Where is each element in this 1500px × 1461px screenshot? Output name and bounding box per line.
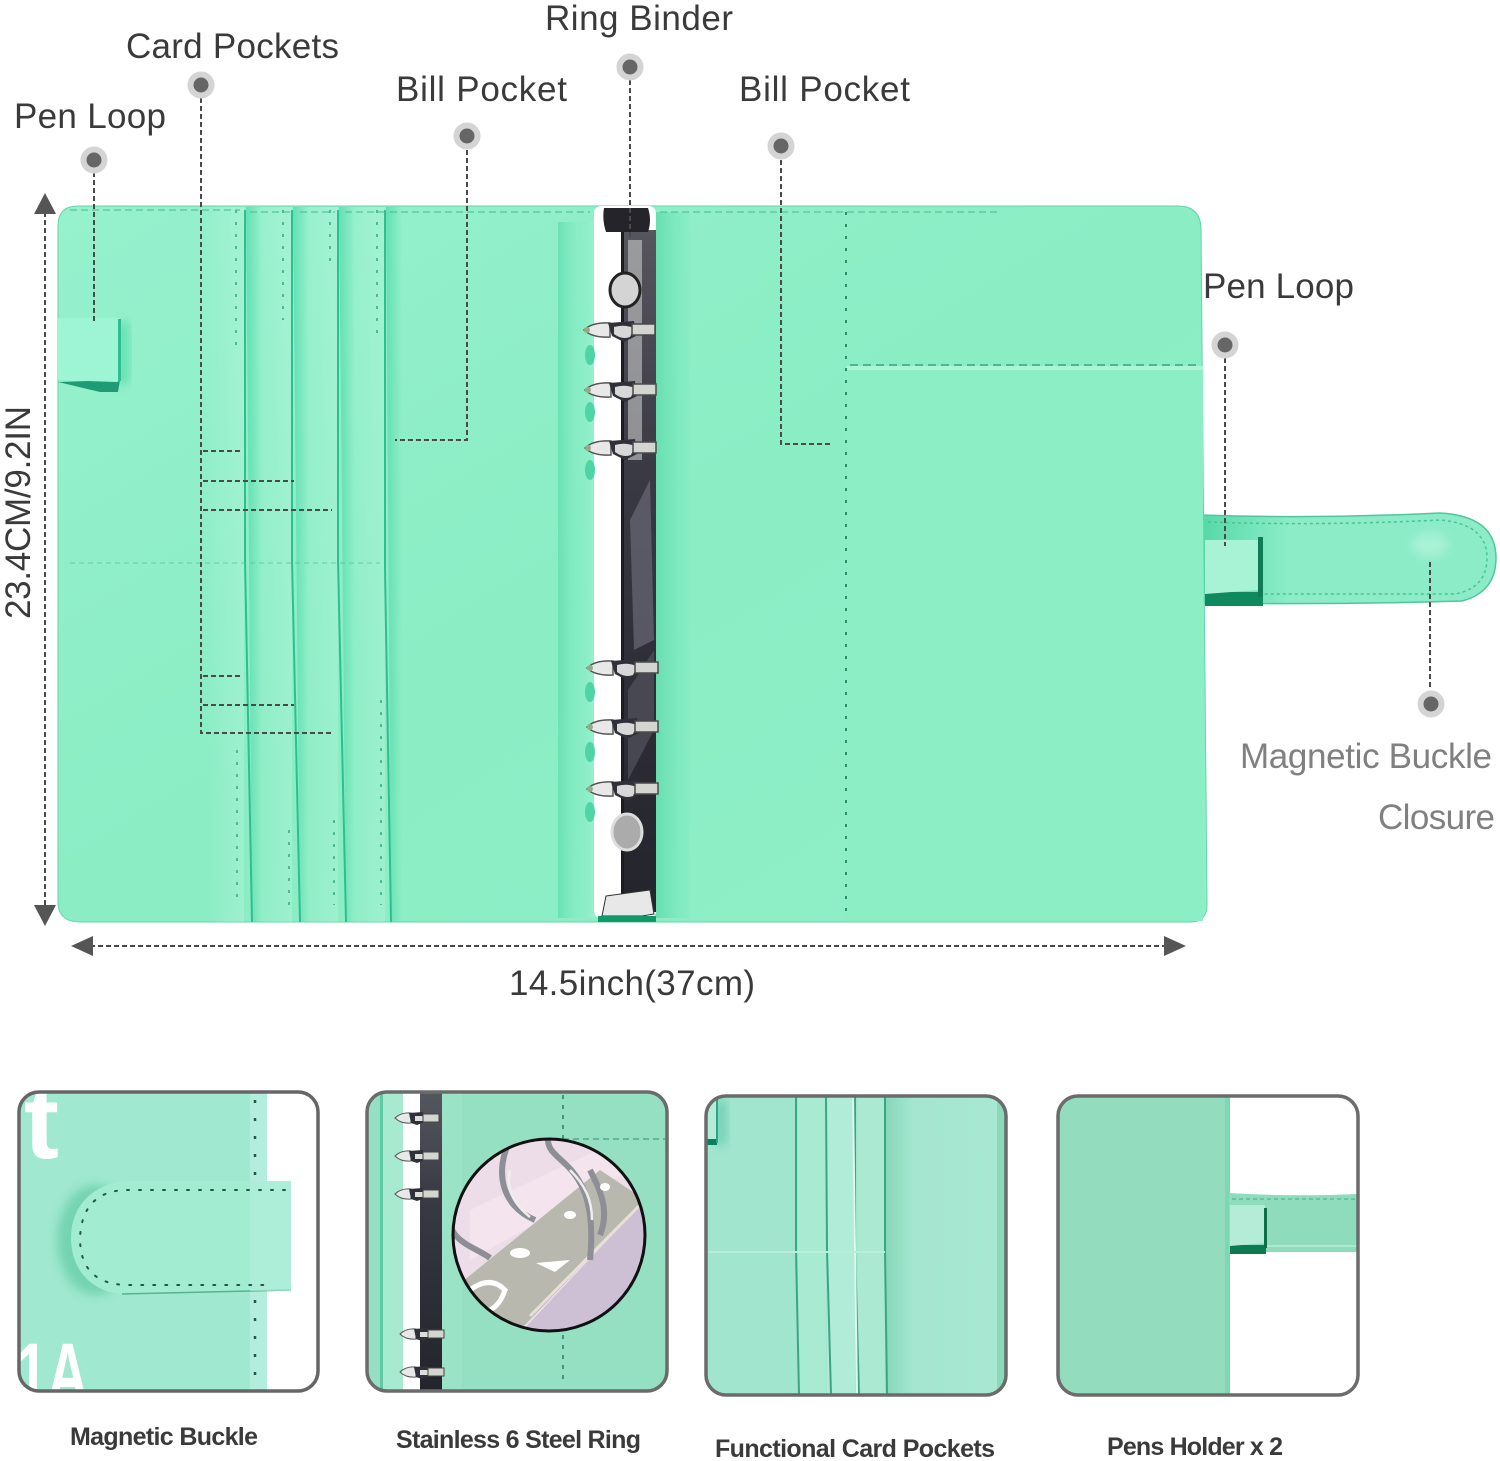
- callout labels: Card Pockets: [126, 27, 339, 66]
- callout labels: Magnetic Buckle: [1240, 737, 1492, 776]
- callout labels: Closure: [1378, 798, 1495, 837]
- callout labels: Pen Loop: [14, 97, 166, 136]
- width dimension: [71, 936, 1186, 1003]
- height dimension: 23.4CM/9.2IN: [0, 406, 38, 619]
- callout labels: Pen Loop: [1203, 267, 1354, 306]
- callout labels: Bill Pocket: [739, 70, 910, 109]
- ring notches: [585, 345, 595, 822]
- magnified ring circle: [454, 1140, 644, 1330]
- strap: [1200, 513, 1496, 604]
- width dimension: 14.5inch(37cm): [509, 964, 755, 1003]
- callout dots: [84, 56, 1442, 714]
- panel captions: [70, 1423, 1283, 1461]
- panel: pens holder: [1058, 1096, 1358, 1395]
- callout labels: Ring Binder: [545, 0, 733, 38]
- rings: [584, 321, 658, 801]
- panel: magnetic buckle: [17, 1090, 320, 1393]
- cover: [58, 206, 1207, 922]
- panel captions: Pens Holder x 2: [1107, 1433, 1283, 1461]
- rivets: [610, 273, 642, 850]
- ring binder: [584, 206, 658, 922]
- panel: magnetic buckle: 1A: [16, 1326, 88, 1420]
- panel: card pockets: [706, 1096, 1006, 1395]
- callout labels: [14, 0, 1495, 837]
- panel: magnetic buckle: t: [24, 1064, 59, 1181]
- panel captions: Stainless 6 Steel Ring: [396, 1426, 641, 1454]
- left pen loop: [58, 318, 128, 392]
- panel: steel ring: [367, 1092, 667, 1391]
- callout labels: Bill Pocket: [396, 70, 567, 109]
- callout lines: [94, 80, 1430, 733]
- panel captions: Magnetic Buckle: [70, 1423, 258, 1451]
- card pocket shadows: [205, 207, 1203, 922]
- pocket edges: [245, 210, 391, 922]
- right pen loop: [1205, 537, 1263, 606]
- height dimension: [0, 193, 56, 926]
- stitching: [70, 210, 1198, 920]
- main binder: [58, 206, 1496, 922]
